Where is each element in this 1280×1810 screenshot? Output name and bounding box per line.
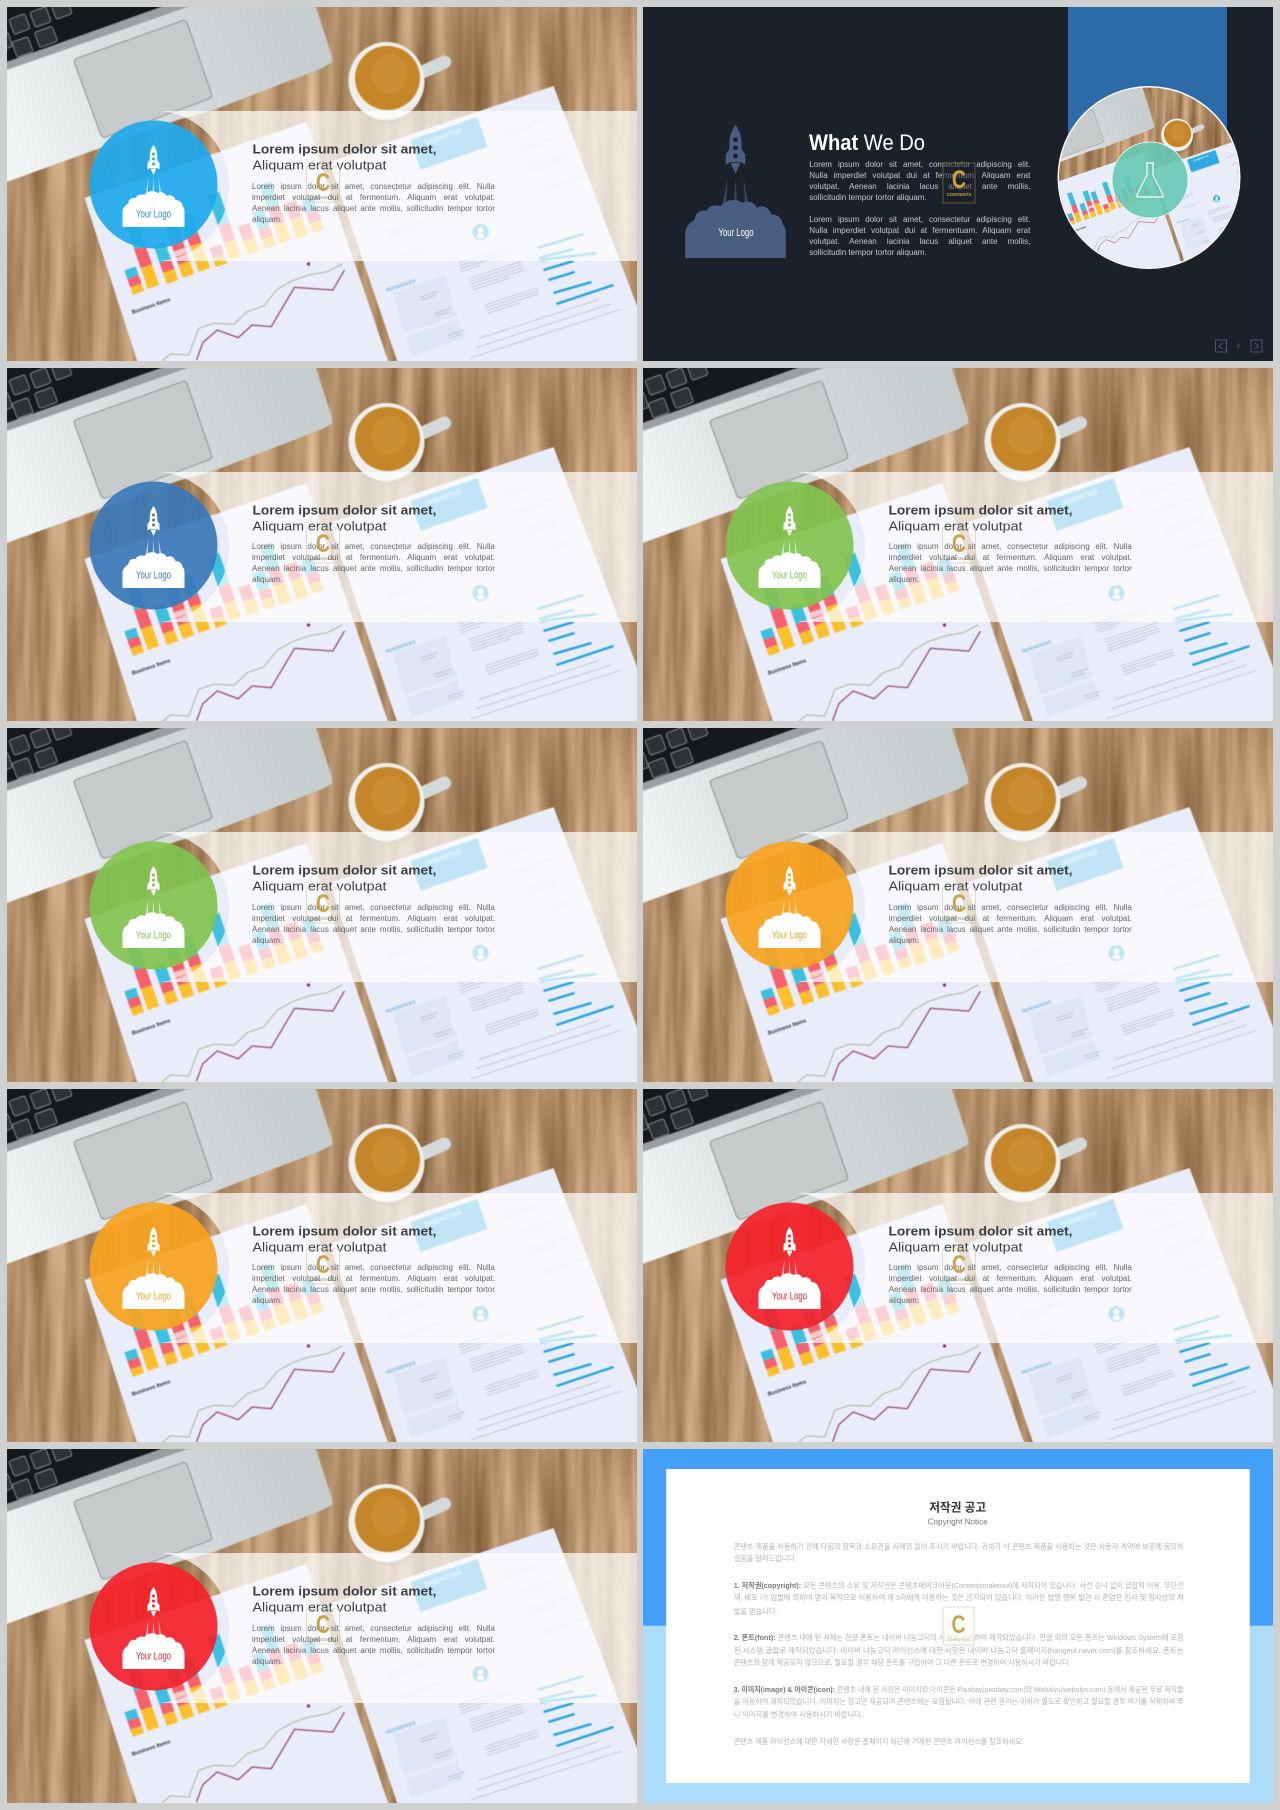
panel: slide 5 green logo	[7, 728, 637, 1082]
icon: rocket logo	[122, 145, 184, 227]
body text: sollicitudin tempor tortor aliquam.	[809, 193, 927, 202]
notice text: 3. 이미지(image) & 아이콘(icon): 콘텐츠 내에 된 사진은 이미지와 아이콘은 Pixabay(pixabay.com)와 Webalys(webalys.com) 등에서 제공된 무료 저작물	[734, 1684, 1184, 1694]
watermark	[943, 1607, 974, 1645]
body text: imperdiet volutpat dui at fermentum. Aliquam erat volutpat.	[889, 1274, 1132, 1283]
photo circle	[1058, 86, 1240, 269]
logo text: Your Logo	[719, 227, 754, 239]
body text: imperdiet volutpat dui at fermentum. Aliquam erat volutpat.	[889, 553, 1132, 562]
logo circle	[89, 120, 217, 248]
background photo	[630, 720, 1277, 1083]
body text: Lorem ipsum dolor sit amet, consectetur adipiscing elit. Nulla	[889, 902, 1132, 912]
notice text: 콘텐츠 제품을 사용하기 전에 다음의 항목과 소유권을 사례의 읽어 주시기 바랍니다. 귀하가 이 콘텐츠 제품을 사용하는 것은 사용자 계약에 보증에 동의하	[734, 1541, 1184, 1551]
body text: Aenean lacinia lacus aliquet ante mollis, sollicitudin tempor tortor	[252, 204, 495, 213]
body text: Nulla imperdiet volutpat dui at fermentuam. Aliquam erat	[809, 226, 1030, 235]
icon: rocket logo	[686, 125, 786, 258]
notice text: 니 이미지를 변경하여 사용하시기 바랍니다.	[734, 1709, 863, 1719]
panel: slide 10 copyright notice	[643, 1449, 1273, 1803]
subheading: Aliquam erat volutpat	[252, 878, 386, 894]
logo text: Your Logo	[136, 569, 170, 581]
watermark: C	[316, 530, 330, 558]
watermark	[306, 1608, 340, 1644]
panel: slide 6 orange logo	[643, 728, 1273, 1082]
panel: slide 9 red logo	[7, 1449, 637, 1803]
subheading: Aliquam erat volutpat	[252, 1600, 386, 1615]
body text: Aenean lacinia lacus aliquet ante mollis, sollicitudin tempor tortor	[252, 925, 495, 934]
watermark: CONTENTS	[947, 192, 972, 197]
body text: Nulla imperdiet volutpat dui at fermentum. Aliquam erat	[809, 171, 1030, 180]
navigation arrows	[1216, 340, 1262, 352]
watermark	[306, 166, 340, 202]
body text: Aenean lacinia lacus aliquet ante mollis, sollicitudin tempor tortor	[252, 1285, 495, 1294]
background photo	[0, 1080, 640, 1444]
watermark: CONTENTS	[948, 916, 971, 921]
body text: Lorem ipsum dolor sit amet, consectetur adipiscing elit. Nulla	[889, 1263, 1132, 1272]
background photo	[0, 720, 640, 1083]
logo circle	[726, 481, 854, 609]
white notice card	[666, 1469, 1250, 1783]
watermark	[942, 1248, 976, 1284]
logo circle	[726, 842, 854, 970]
watermark: CONTENTS	[312, 1637, 334, 1642]
heading: Lorem ipsum dolor sit amet,	[889, 502, 1073, 517]
body text	[809, 160, 1030, 257]
translucent text band	[797, 472, 1280, 622]
body text	[888, 1263, 1132, 1305]
icon: rocket logo	[759, 506, 821, 588]
body text: aliquam.	[889, 936, 919, 945]
body text: Lorem ipsum dolor sit amet, consectetur adipiscing elit. Nulla	[252, 182, 495, 190]
watermark: CONTENTS	[312, 556, 334, 560]
watermark: C	[952, 1611, 966, 1639]
watermark	[942, 888, 976, 924]
body text: aliquam.	[252, 1296, 282, 1305]
watermark: C	[316, 1250, 330, 1278]
icon: teal flask circle	[1112, 142, 1188, 218]
logo circle	[89, 842, 217, 970]
watermark: C	[952, 890, 966, 918]
subheading: Aliquam erat volutpat	[252, 158, 386, 172]
heading: Lorem ipsum dolor sit amet,	[252, 142, 436, 156]
background photo	[630, 1080, 1277, 1444]
body text: volutpat. Aenean lacinia lacus aliquet ante mollis,	[809, 237, 1030, 246]
body text	[252, 542, 495, 584]
notice text: 콘텐츠와 함께 제공되지 않으므로, 필요할 경우 해당 폰트를 구입하여 그 다른 폰트로 변경하여 사용하시기 바랍니다.	[734, 1657, 1071, 1667]
watermark	[306, 888, 340, 924]
notice text: 콘텐츠 제품 라이선스에 대한 자세한 사항은 홈페이지 하단에 기재된 콘텐츠 라이선스를 참조하세요.	[734, 1736, 1024, 1746]
body text: Aenean lacinia lacus aliquet ante mollis, sollicitudin tempor tortor	[889, 564, 1132, 573]
watermark: CONTENTS	[312, 1276, 334, 1282]
heading: Lorem ipsum dolor sit amet,	[252, 1584, 436, 1599]
background photo	[0, 359, 640, 722]
body text: Lorem ipsum dolor sit amet, consectetur adipiscing elit. Nulla	[252, 542, 495, 551]
blue vertical band	[1068, 7, 1227, 177]
subheading: Aliquam erat volutpat	[252, 518, 386, 533]
notice text: 벌을 받습니다.	[734, 1606, 778, 1616]
translucent text band	[797, 1192, 1280, 1342]
notice text: 된 시스템 글꼴로 제작되었습니다. 네이버 나눔고딕 라이선스에 대한 사항은 네이버 나눔고딕 홈페이지(hangeul.naver.com)를 참조하세요. 폰트는	[734, 1645, 1184, 1655]
notice text: 2. 폰트(font): 콘텐츠 내에 된 서체는 한글 폰트는 네이버 나눔고딕의 서체로 사용하여 제작되었습니다. 한글 외의 모든 폰트는 Windows System에 포함	[734, 1632, 1184, 1642]
body text: Lorem ipsum dolor sit amet, consectetur adipiscing elit. Nulla	[252, 1263, 495, 1272]
body text: imperdiet volutpat dui at fermentum. Aliquam erat volutpat.	[252, 193, 495, 202]
notice text: 셨음을 알려드립니다.	[734, 1553, 797, 1563]
body text: Aenean lacinia lacus aliquet ante mollis, sollicitudin tempor tortor	[252, 1646, 495, 1655]
watermark: CONTENTS	[948, 1276, 971, 1282]
translucent text band	[160, 832, 646, 982]
body text: imperdiet volutpat dui at fermentum. Aliquam erat volutpat.	[252, 553, 495, 562]
body text: Aenean lacinia lacus aliquet ante mollis, sollicitudin tempor tortor	[252, 564, 495, 573]
watermark	[942, 162, 976, 204]
body text: Lorem ipsum dolor sit amet, consectetur adipiscing elit. Nulla	[889, 542, 1132, 551]
heading: What We Do	[809, 130, 925, 155]
page number: 3	[1237, 344, 1241, 350]
body text	[888, 542, 1132, 584]
body text: aliquam.	[889, 575, 919, 584]
watermark: CONTENTS	[948, 556, 971, 560]
background photo	[0, 0, 640, 362]
heading: Lorem ipsum dolor sit amet,	[252, 1223, 436, 1238]
body text: aliquam.	[252, 575, 282, 584]
body text: Aenean lacinia lacus aliquet ante mollis, sollicitudin tempor tortor	[889, 1285, 1132, 1294]
heading: Lorem ipsum dolor sit amet,	[252, 502, 436, 517]
blue top background	[643, 1449, 1273, 1626]
watermark	[306, 528, 340, 564]
subtitle: Copyright Notice	[928, 1517, 988, 1527]
body text: volutpat. Aenean lacinia lacus aliquet ante mollis,	[809, 182, 1030, 191]
body text: imperdiet volutpat dui at fermentum. Aliquam erat volutpat.	[252, 1274, 495, 1283]
heading: Lorem ipsum dolor sit amet,	[889, 1223, 1073, 1238]
subheading: Aliquam erat volutpat	[889, 1239, 1023, 1254]
translucent text band	[797, 832, 1280, 982]
logo circle	[726, 1202, 854, 1330]
body text: Lorem ipsum dolor sit amet, consectetur adipiscing elit.	[809, 215, 1030, 224]
icon: rocket logo	[122, 1587, 184, 1669]
icon: rocket logo	[122, 506, 184, 588]
body text: Lorem ipsum dolor sit amet, consectetur adipiscing elit. Nulla	[252, 902, 495, 912]
icon: rocket logo	[122, 1226, 184, 1308]
translucent text band	[160, 111, 646, 261]
logo circle	[89, 1563, 217, 1691]
body text	[888, 902, 1132, 945]
heading: Lorem ipsum dolor sit amet,	[252, 862, 436, 878]
watermark: C	[952, 530, 966, 558]
background photo	[630, 359, 1277, 722]
watermark: C	[316, 169, 330, 197]
panel: slide 3 steel blue logo	[7, 368, 637, 721]
notice text: 을 이용하여 제작되었습니다. 이미지는 참고만 제공되며 콘텐츠에는 포함됩니다. 이에 관련 권리는 귀하가 별도로 확인하고 필요할 경우 여기를 삭제하여 주	[734, 1696, 1184, 1706]
watermark: CONTENTS	[948, 1637, 970, 1642]
body text	[252, 902, 495, 945]
subheading: Aliquam erat volutpat	[252, 1239, 386, 1254]
subheading: Aliquam erat volutpat	[889, 518, 1023, 533]
notice text	[734, 1541, 1184, 1746]
panel: slide 1 blue logo	[7, 7, 637, 361]
panel: slide 2 what we do	[643, 7, 1273, 360]
body text: imperdiet volutpat dui at fermentum. Aliquam erat volutpat.	[252, 914, 495, 923]
subheading: Aliquam erat volutpat	[889, 878, 1023, 894]
body text: sollicitudin tempor tortor aliquam.	[809, 248, 927, 257]
panel: slide 8 red logo	[643, 1089, 1273, 1442]
translucent text band	[160, 1553, 646, 1703]
watermark: C	[316, 1611, 330, 1639]
logo text: Your Logo	[772, 1290, 807, 1302]
body text	[252, 1624, 495, 1666]
icon: rocket logo	[122, 866, 184, 948]
translucent text band	[160, 1192, 646, 1342]
watermark: CONTENTS	[312, 195, 334, 200]
logo text: Your Logo	[136, 1651, 170, 1663]
body text: aliquam.	[889, 1296, 919, 1305]
logo circle	[89, 481, 217, 609]
title: 저작권 공고	[929, 1500, 986, 1515]
watermark: C	[952, 166, 966, 194]
body text	[252, 182, 495, 224]
translucent text band	[160, 472, 646, 622]
watermark: CONTENTS	[312, 916, 334, 921]
notice text: 재, 배포 /가 임벌에 의하여 영리 목적으로 이용하여 제 3자에게 이용하는 것은 금지되어 있습니다. 이러한 법령 행위 발견 시 준엄한 민사 및 형사상의 처	[734, 1592, 1184, 1602]
icon: rocket logo	[759, 1226, 821, 1308]
notice text: 1. 저작권(copyright): 모든 콘텐츠의 소유 및 저작권은 콘텐츠메이크아웃(Contentsmakeout)에 저작되어 있습니다. 사전 승낙 없이 급합적 이용, 무단전	[734, 1580, 1184, 1590]
watermark: C	[316, 890, 330, 918]
watermark: C	[952, 1250, 966, 1278]
body text: Lorem ipsum dolor sit amet, consectetur adipiscing elit. Nulla	[252, 1624, 495, 1633]
logo text: Your Logo	[136, 930, 170, 942]
watermark	[942, 528, 976, 564]
heading: Lorem ipsum dolor sit amet,	[889, 862, 1073, 878]
logo text: Your Logo	[772, 569, 807, 581]
panel: slide 7 orange logo	[7, 1089, 637, 1442]
background photo	[0, 1441, 640, 1804]
body text: imperdiet volutpat dui at fermentum. Aliquam erat volutpat.	[889, 914, 1132, 923]
body text: aliquam.	[252, 1657, 282, 1666]
logo text: Your Logo	[772, 930, 807, 942]
watermark	[306, 1248, 340, 1284]
icon: rocket logo	[759, 866, 821, 948]
logo circle	[89, 1202, 217, 1330]
body text: Aenean lacinia lacus aliquet ante mollis, sollicitudin tempor tortor	[889, 925, 1132, 934]
logo text: Your Logo	[136, 208, 170, 220]
body text: imperdiet volutpat dui at fermentum. Aliquam erat volutpat.	[252, 1635, 495, 1644]
logo text: Your Logo	[136, 1290, 170, 1302]
body text: Lorem ipsum dolor sit amet, consectetur adipiscing elit.	[809, 160, 1030, 168]
body text: aliquam.	[252, 215, 282, 224]
body text: aliquam.	[252, 936, 282, 945]
body text	[252, 1263, 495, 1305]
panel: slide 4 green logo	[643, 368, 1273, 721]
